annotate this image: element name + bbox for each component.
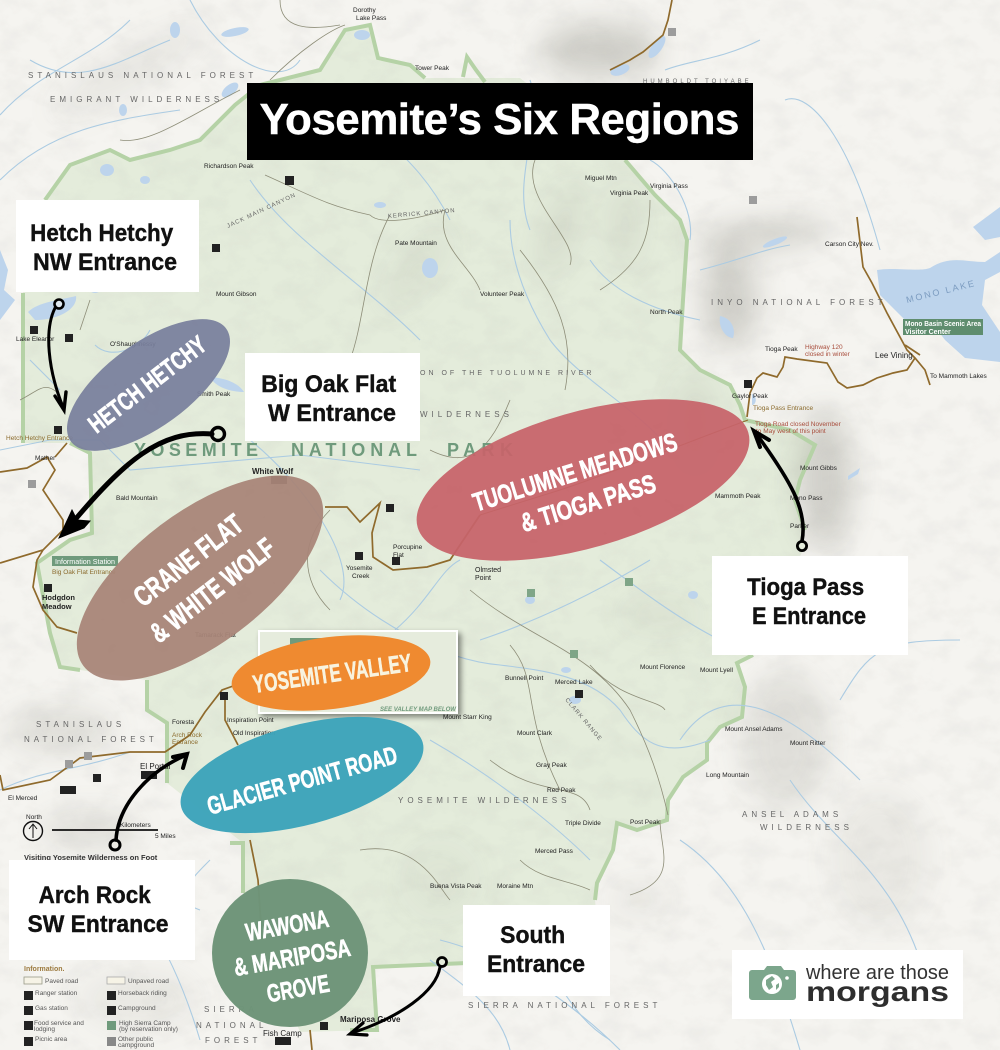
place labels: Long Mountain: [706, 772, 749, 779]
label: Arch Rock SW Entrance: Arch Rock: [39, 882, 151, 909]
place labels: Porcupine: [393, 544, 423, 551]
map labels: EMIGRANT WILDERNESS: [50, 95, 223, 104]
place labels: Mammoth Peak: [715, 493, 761, 500]
arrow: Big Oak Flat: [59, 428, 224, 538]
green signs: [52, 319, 983, 566]
map labels: CLARK RANGE: [563, 697, 603, 743]
arrow: Hetch Hetchy: [49, 300, 66, 410]
place labels: Parker: [790, 523, 810, 530]
place labels: Inspiration Point: [227, 717, 274, 724]
place labels: Mount Lyell: [700, 667, 734, 674]
region: Crane Flat and White Wolf: [44, 437, 356, 719]
place labels: Tioga Pass Entrance: [753, 405, 813, 412]
place labels: Gaylor Peak: [732, 393, 769, 400]
place labels: El Merced: [8, 795, 38, 802]
arrow: Tioga Pass: [754, 431, 807, 551]
place labels: Miguel Mtn: [585, 175, 617, 182]
place labels: Arch Rock: [172, 732, 203, 739]
map labels: STANISLAUS: [36, 720, 125, 729]
place labels: Foresta: [172, 719, 194, 726]
scale bar and north arrow: [24, 822, 158, 840]
map icons: [30, 176, 752, 1045]
place labels: Mount Starr King: [443, 714, 492, 721]
place labels: Bunnell Point: [505, 675, 543, 682]
place labels: Richardson Peak: [204, 163, 254, 170]
region: Wawona and Mariposa Grove: [212, 879, 368, 1027]
place labels: North: [26, 814, 42, 821]
region: Wawona and Mariposa Grove: & MARIPOSA: [232, 934, 353, 982]
legend: High Sierra Camp: [119, 1020, 171, 1027]
title: [247, 83, 753, 160]
logo: where are those morgans: morgans: [806, 976, 949, 1007]
valley map inset: [259, 631, 457, 713]
label: Hetch Hetchy NW Entrance: NW Entrance: [33, 249, 177, 276]
place labels: Mariposa Grove: [340, 1015, 401, 1024]
place labels: Bald Mountain: [116, 495, 158, 502]
place labels: Mount Ansel Adams: [725, 726, 783, 733]
region: Glacier Point Road: [168, 694, 436, 856]
lakes: [0, 22, 1000, 704]
map labels: WILDERNESS: [420, 410, 513, 419]
map labels: INYO NATIONAL FOREST: [711, 298, 887, 307]
map labels: SIERRA NATIONAL FOREST: [468, 1001, 661, 1010]
legend: Horseback riding: [118, 990, 167, 997]
map labels: KERRICK CANYON: [388, 208, 456, 220]
place labels: Post Peak: [630, 819, 660, 826]
place labels: Mount Ritter: [790, 740, 826, 747]
place labels: Fish Camp: [263, 1029, 302, 1038]
place labels: Dorothy: [353, 7, 377, 14]
place labels: Mount Clark: [517, 730, 553, 737]
place labels: White Wolf: [252, 467, 294, 476]
place labels: Hodgdon: [42, 593, 75, 602]
legend: Food service and: [34, 1020, 84, 1027]
place labels: Creek: [352, 573, 370, 580]
map labels: STANISLAUS NATIONAL FOREST: [28, 71, 257, 80]
region: Hetch Hetchy: [46, 295, 251, 475]
place labels: Virginia Peak: [610, 190, 649, 197]
label: Hetch Hetchy NW Entrance: [16, 200, 199, 292]
region: Yosemite Valley: YOSEMITE VALLEY: [251, 649, 414, 699]
legend: Information.: [24, 966, 64, 973]
label: Tioga Pass E Entrance: Tioga Pass: [747, 574, 864, 601]
place labels: to May west of this point: [756, 428, 826, 435]
place labels: 5 Miles: [155, 833, 176, 840]
place labels: Merced Pass: [535, 848, 574, 855]
label: Arch Rock SW Entrance: SW Entrance: [28, 911, 168, 938]
place labels: Carson City Nev.: [825, 241, 874, 248]
legend: Campground: [118, 1005, 156, 1012]
place labels: Kilometers: [120, 822, 151, 829]
place labels: Hetch Hetchy Entrance: [6, 435, 73, 442]
place labels: Lake Pass: [356, 15, 387, 22]
place labels: Mono Pass: [790, 495, 823, 502]
place labels: El Portal: [140, 762, 170, 771]
place labels: Tamarack Flat: [195, 632, 236, 639]
legend: Paved road: [45, 978, 79, 985]
label: Big Oak Flat W Entrance: Big Oak Flat: [261, 371, 396, 398]
valley map inset: SEE VALLEY MAP BELOW: [380, 706, 457, 713]
place labels: Flat: [393, 552, 404, 559]
place labels: Volunteer Peak: [480, 291, 525, 298]
region: Crane Flat and White Wolf: & WHITE WOLF: [144, 532, 281, 649]
arrow: South Entrance: [350, 958, 446, 1035]
legend: (by reservation only): [119, 1026, 178, 1033]
label: Tioga Pass E Entrance: E Entrance: [752, 603, 866, 630]
place labels: North Peak: [650, 309, 683, 316]
place labels: Mather: [35, 455, 56, 462]
place labels: Red Peak: [547, 787, 576, 794]
region: Tuolumne Meadows and Tioga Pass: & TIOGA PASS: [517, 468, 659, 538]
map labels: SIERRA: [204, 1005, 258, 1014]
park name label: YOSEMITE: [134, 440, 258, 460]
legend: [24, 966, 178, 1049]
label: Hetch Hetchy NW Entrance: Hetch Hetchy: [30, 220, 174, 247]
trails: [20, 0, 668, 900]
green signs: Mono Basin Scenic Area: [905, 321, 981, 328]
legend: Gas station: [35, 1005, 68, 1012]
legend: Picnic area: [35, 1036, 68, 1043]
region: Tuolumne Meadows and Tioga Pass: TUOLUMNE MEADOWS: [469, 427, 681, 517]
place labels: Olmsted: [475, 567, 501, 574]
place labels: Virginia Pass: [650, 183, 689, 190]
region: Hetch Hetchy: HETCH HETCHY: [83, 331, 212, 439]
park name label: [134, 440, 513, 460]
park name label: PARK: [447, 440, 513, 460]
map labels: NATIONAL: [196, 1021, 267, 1030]
place labels: Yosemite: [346, 565, 373, 572]
place labels: Moraine Mtn: [497, 883, 534, 890]
logo: where are those morgans: where are those: [805, 962, 949, 984]
place labels: O'Shaughnessy: [110, 341, 156, 348]
map labels: NATIONAL FOREST: [24, 735, 158, 744]
place labels: Highway 120: [805, 344, 843, 351]
place labels: Tioga Peak: [765, 346, 798, 353]
place labels: Lake Eleanor: [16, 336, 55, 343]
legend: Other public: [118, 1036, 154, 1043]
icon: camera: [749, 966, 796, 1000]
park boundary: [23, 25, 815, 1030]
label: Tioga Pass E Entrance: [712, 556, 908, 655]
place labels: Triple Divide: [565, 820, 601, 827]
map labels: JACK MAIN CANYON: [226, 193, 297, 230]
label: South Entrance: Entrance: [487, 951, 585, 978]
region: Crane Flat and White Wolf: CRANE FLAT: [128, 508, 249, 613]
map labels: ANSEL ADAMS: [742, 810, 842, 819]
arrow: Arch Rock: [110, 754, 187, 850]
map labels: WILDERNESS: [760, 823, 853, 832]
legend: Ranger station: [35, 990, 78, 997]
place labels: Tioga Road closed November: [755, 421, 842, 428]
map labels: YOSEMITE WILDERNESS: [398, 796, 570, 805]
label: Big Oak Flat W Entrance: [245, 353, 420, 441]
legend: lodging: [34, 1026, 55, 1033]
place labels: Visiting Yosemite Wilderness on Foot: [24, 853, 158, 862]
place labels: Mount Florence: [640, 664, 686, 671]
place labels: Buena Vista Peak: [430, 883, 482, 890]
place labels: Point: [475, 575, 491, 582]
place labels: Merced Lake: [555, 679, 593, 686]
place labels: Mount Gibson: [216, 291, 257, 298]
map labels: FOREST: [205, 1036, 261, 1045]
legend: Unpaved road: [128, 978, 169, 985]
place labels: Old Inspiration: [233, 730, 275, 737]
label: South Entrance: [463, 905, 610, 996]
logo: where are those morgans: [732, 950, 963, 1019]
park area tint: [23, 25, 815, 1032]
label: South Entrance: South: [500, 922, 565, 949]
place labels: Tower Peak: [415, 65, 450, 72]
place labels: closed in winter: [805, 351, 851, 358]
place labels: Meadow: [42, 602, 72, 611]
map labels: ON OF THE TUOLUMNE RIVER: [420, 370, 594, 377]
region: Glacier Point Road: GLACIER POINT ROAD: [204, 741, 400, 821]
park name label: NATIONAL: [291, 440, 417, 460]
green signs: Information Station: [55, 557, 115, 566]
place labels: Pate Mountain: [395, 240, 437, 247]
place labels: Entrance: [172, 739, 198, 746]
green signs: Visitor Center: [905, 329, 951, 336]
region: Wawona and Mariposa Grove: GROVE: [265, 970, 332, 1008]
title: Yosemite’s Six Regions: [260, 95, 740, 144]
place labels: Gray Peak: [536, 762, 567, 769]
label: Arch Rock SW Entrance: [9, 860, 195, 960]
region: Tuolumne Meadows and Tioga Pass: [399, 367, 767, 593]
place labels: Lee Vining: [875, 351, 913, 360]
Mono Lake label: MONO LAKE: [905, 278, 977, 305]
map labels: HUMBOLDT TOIYABE: [643, 79, 752, 85]
place labels: Mount Gibbs: [800, 465, 838, 472]
place labels: Big Oak Flat Entrance: [52, 569, 116, 576]
legend: campground: [118, 1042, 155, 1049]
place labels: To Mammoth Lakes: [930, 373, 987, 380]
region: Yosemite Valley: [227, 625, 435, 721]
place labels: Smith Peak: [197, 391, 231, 398]
label: Big Oak Flat W Entrance: W Entrance: [268, 400, 396, 427]
region: Wawona and Mariposa Grove: WAWONA: [243, 905, 331, 947]
